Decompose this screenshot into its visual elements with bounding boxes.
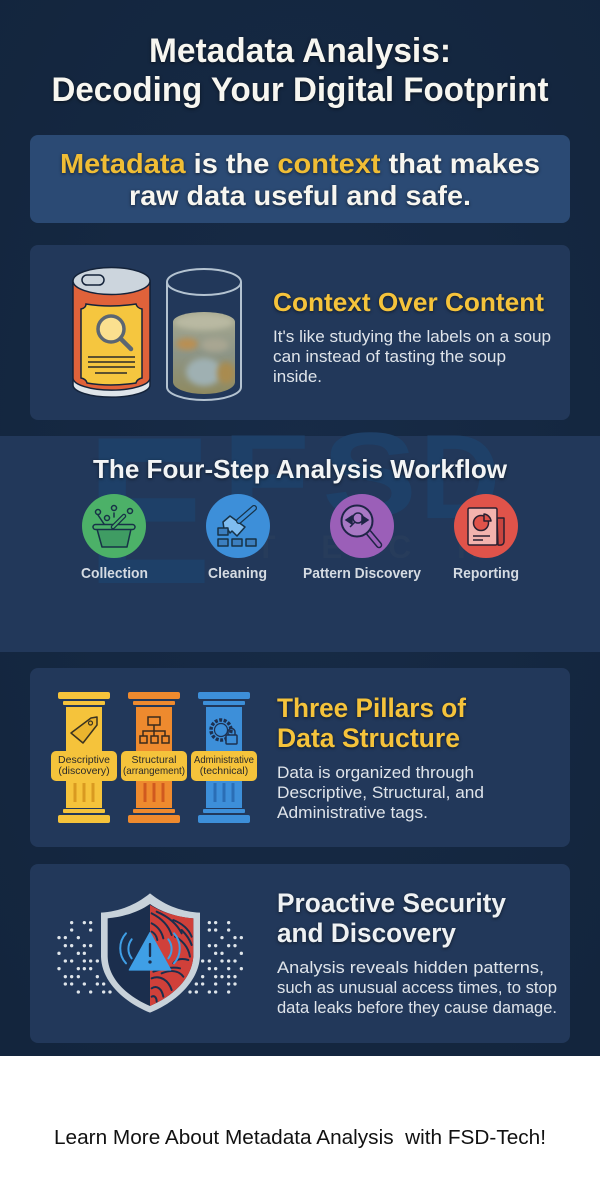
panel: context over content	[30, 245, 570, 420]
panel: key message banner: Metadata is the context that makes	[60, 148, 540, 179]
heading: proactive security: Proactive Security	[277, 888, 506, 918]
text: security description: Analysis reveals hidden patterns,	[277, 959, 544, 977]
text: soup analogy: can instead of tasting the soup	[273, 347, 506, 366]
text: pillars description	[277, 763, 484, 822]
text: soup analogy	[273, 327, 551, 386]
text: pillars description: Descriptive, Structural, and	[277, 783, 484, 802]
text: soup analogy: inside.	[273, 367, 322, 386]
step labels	[81, 565, 519, 582]
step: cleaning	[206, 494, 270, 558]
title: Metadata Analysis:	[149, 32, 451, 70]
step: collection	[82, 494, 146, 558]
step: reporting	[454, 494, 518, 558]
panel: proactive security	[30, 864, 570, 1043]
text: pillars description: Administrative tags.	[277, 803, 428, 822]
pillar: structural: Structural	[132, 754, 176, 766]
step labels: Cleaning	[208, 565, 267, 582]
panel: key message banner: raw data useful and safe.	[129, 180, 471, 211]
pillar: administrative: (technical)	[200, 765, 248, 777]
text: pillars description: Data is organized through	[277, 763, 474, 782]
panel: key message banner	[30, 135, 570, 223]
panel: three pillars	[30, 668, 570, 847]
pillar: descriptive	[51, 692, 117, 823]
step labels: Pattern Discovery	[303, 565, 422, 582]
heading: three pillars: Three Pillars of	[277, 693, 467, 723]
icon: glass of soup	[167, 269, 241, 400]
pillar: structural: (arrangement)	[123, 765, 185, 777]
icon: shield with data dots	[57, 893, 243, 1013]
step labels: Reporting	[453, 565, 519, 582]
footer call to action: Learn More About Metadata Analysis with FSD-Tech!	[54, 1127, 546, 1149]
step labels: Collection	[81, 565, 148, 582]
watermark: FSD Tech	[86, 393, 500, 628]
watermark: FSD Tech: D	[420, 410, 500, 544]
pillar: structural	[121, 692, 187, 823]
heading: context over content: Context Over Content	[273, 287, 544, 317]
pillar: descriptive: (discovery)	[58, 765, 110, 777]
panel: four-step workflow band	[0, 393, 600, 652]
step: pattern discovery	[330, 494, 394, 558]
text: soup analogy: It's like studying the labels on a soup	[273, 327, 551, 346]
pillar: administrative: Administrative	[194, 754, 254, 766]
heading: three pillars	[277, 693, 467, 753]
watermark: FSD Tech: E	[86, 393, 212, 628]
pillar: descriptive: Descriptive	[58, 754, 110, 766]
text: security description: data leaks before they cause damage.	[277, 999, 557, 1017]
watermark: FSD Tech: F	[222, 410, 310, 544]
text: security description	[277, 959, 557, 1017]
text: security description: such as unusual access times, to stop	[277, 979, 557, 997]
title	[52, 32, 548, 109]
heading: proactive security	[277, 888, 506, 948]
heading: proactive security: and Discovery	[277, 918, 456, 948]
watermark: FSD Tech: TECH	[256, 529, 480, 565]
icon: soup can	[73, 268, 150, 397]
heading: three pillars: Data Structure	[277, 723, 460, 753]
pillar: administrative	[191, 692, 257, 823]
watermark: FSD Tech: S	[322, 408, 417, 542]
title: Decoding Your Digital Footprint	[52, 71, 548, 109]
heading: workflow: The Four-Step Analysis Workflow	[93, 454, 508, 484]
